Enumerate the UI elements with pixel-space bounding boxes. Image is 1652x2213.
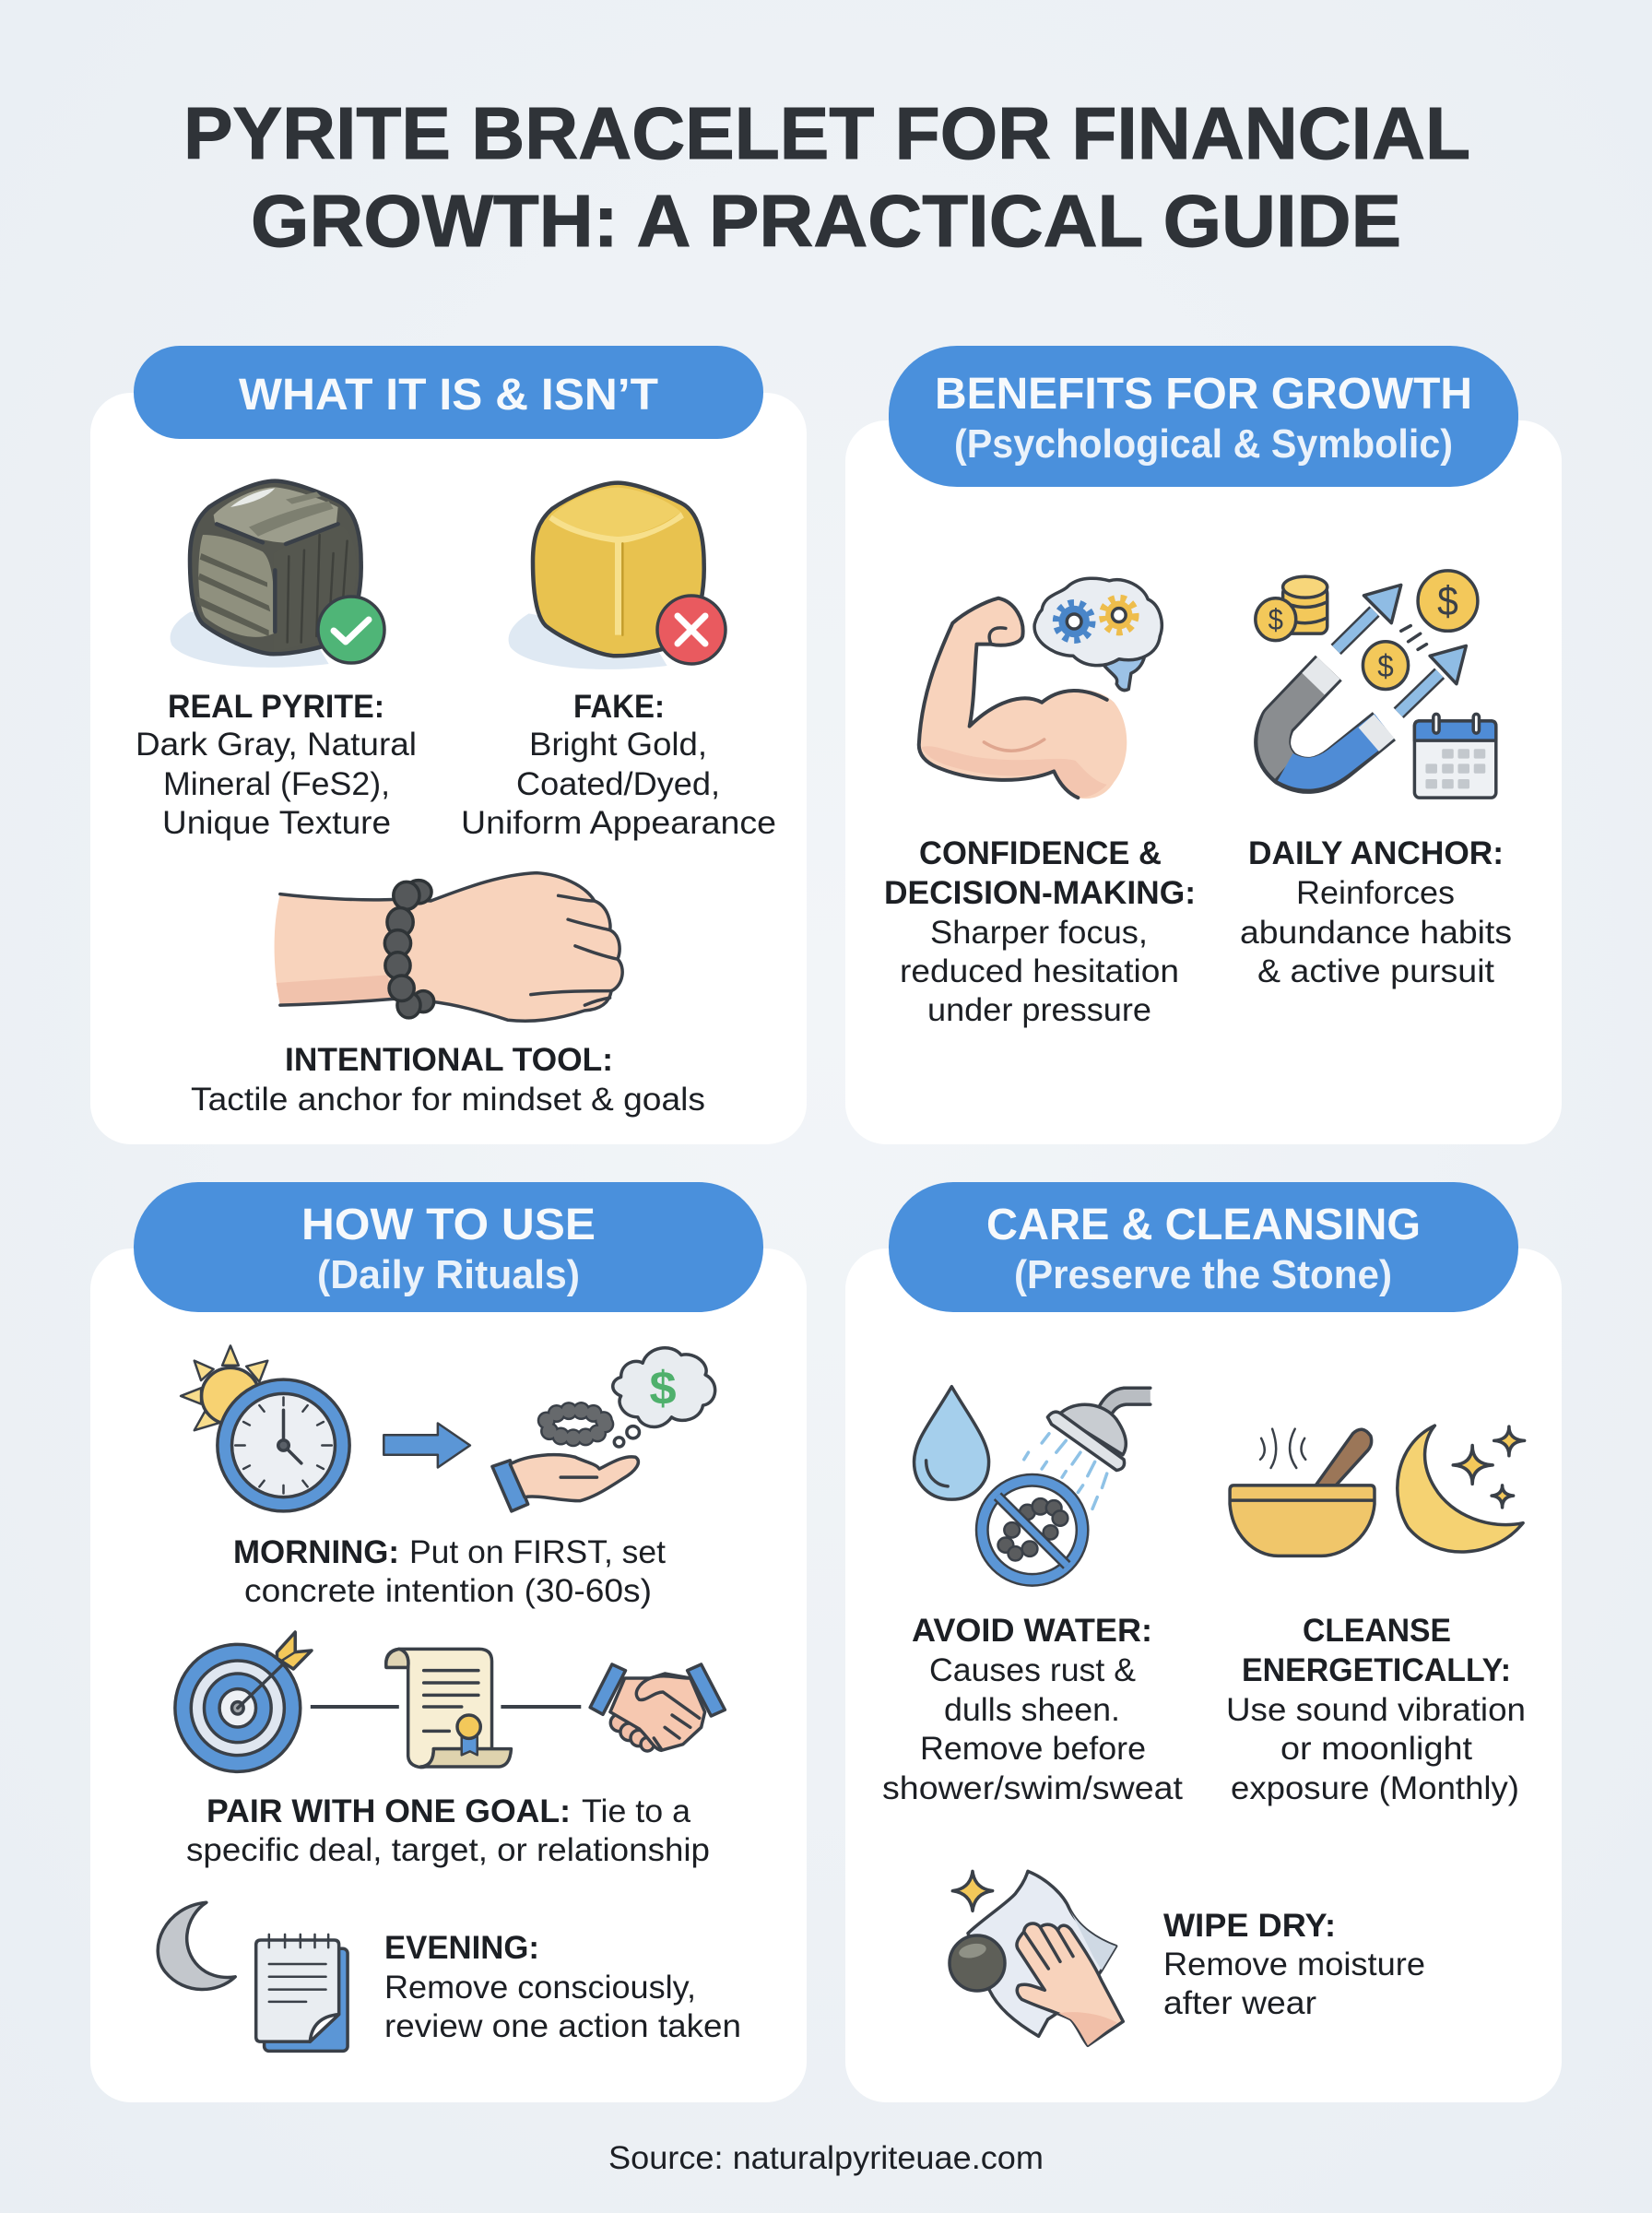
text: cleanse energetically: Use sound vibration (1226, 1692, 1526, 1728)
text: avoid water: Causes rust & (929, 1652, 1136, 1688)
icon: coins: $ (1377, 648, 1394, 684)
text: wipe dry: after wear (1163, 1985, 1316, 2021)
text: confidence and decision-making: Sharper focus, (930, 915, 1148, 951)
text: daily anchor: abundance habits (1240, 915, 1512, 951)
text: intentional tool (191, 1042, 705, 1118)
heading: care and cleansing: (Preserve the Stone) (1014, 1252, 1392, 1297)
icon: coins: $ (1437, 578, 1458, 625)
text: real pyrite: REAL PYRITE: (168, 689, 384, 725)
text: pair with one goal (186, 1793, 710, 1868)
heading: benefits for growth: (Psychological & Symbolic) (954, 421, 1453, 467)
heading: what it is and isn't (134, 346, 763, 439)
icon: crescent moon with stars (1398, 1426, 1525, 1552)
text: fake: Bright Gold, (529, 727, 707, 763)
text: intentional tool: INTENTIONAL TOOL: (285, 1042, 613, 1078)
panel: how to use (90, 1182, 807, 2102)
heading: what it is and isn't: WHAT IT IS & ISN’T (239, 371, 658, 420)
text: cleanse energetically (1226, 1613, 1526, 1806)
heading: care and cleansing (889, 1182, 1518, 1312)
text: wipe dry: Remove moisture (1163, 1947, 1425, 1982)
text: confidence and decision-making: reduced hesitation (900, 953, 1179, 989)
text: evening: EVENING: (384, 1930, 539, 1966)
icon: calendar (1414, 714, 1496, 798)
icon: flexed arm with brain (919, 578, 1162, 799)
icon: wrist with bracelet (275, 873, 622, 1021)
text: pair with one goal: specific deal, target, or relationship (186, 1832, 710, 1868)
text: daily anchor: Reinforces (1296, 875, 1455, 911)
text: fake: FAKE: (573, 689, 665, 725)
panel: benefits for growth (845, 346, 1562, 1144)
text: morning (233, 1534, 666, 1609)
text: daily anchor: DAILY ANCHOR: (1248, 835, 1504, 871)
text: fake: Coated/Dyed, (516, 766, 720, 802)
heading: care and cleansing: CARE & CLEANSING (986, 1201, 1421, 1249)
text: daily anchor: & active pursuit (1257, 953, 1494, 989)
text: morning: concrete intention (30-60s) (244, 1573, 652, 1609)
text: daily anchor (1240, 835, 1512, 989)
text: wipe dry: WIPE DRY: (1163, 1908, 1336, 1944)
icon: target with arrow (175, 1632, 312, 1771)
icon: real pyrite cube (171, 481, 384, 668)
icon: shower head (1024, 1388, 1150, 1509)
text: cleanse energetically: or moonlight (1280, 1731, 1472, 1767)
icon: hand, bracelet and money thought: $ (650, 1361, 677, 1414)
icon: fake gold cube (509, 483, 726, 669)
icon: sun and clock (181, 1345, 349, 1511)
source credit: Source: naturalpyriteuae.com (608, 2140, 1044, 2176)
text: avoid water: AVOID WATER: (912, 1613, 1152, 1649)
text: pair with one goal: Tie to a (582, 1793, 691, 1829)
text: pair with one goal: PAIR WITH ONE GOAL: (206, 1793, 571, 1829)
text: morning: MORNING: (233, 1534, 399, 1570)
text: avoid water: shower/swim/sweat (882, 1770, 1183, 1806)
text: evening: Remove consciously, (384, 1970, 696, 2006)
text: confidence and decision-making: CONFIDENCE & (919, 835, 1162, 871)
icon: singing bowl (1230, 1429, 1375, 1556)
text: avoid water: Remove before (920, 1731, 1146, 1767)
heading: how to use: (Daily Rituals) (317, 1252, 580, 1297)
icon: coins (1256, 571, 1478, 689)
heading: benefits for growth (889, 346, 1518, 487)
panel: what it is and isn't (90, 346, 807, 1144)
text: evening: review one action taken (384, 2008, 741, 2044)
title (183, 92, 1470, 262)
icon: handshake (590, 1664, 725, 1751)
text: morning: Put on FIRST, set (409, 1534, 666, 1570)
icon: cloth wiping stone (950, 1871, 1123, 2045)
icon: water drop (914, 1387, 989, 1499)
text: fake: Uniform Appearance (461, 805, 776, 841)
text: real pyrite: Unique Texture (162, 805, 391, 841)
icon: red cross badge (657, 596, 726, 664)
heading: benefits for growth: BENEFITS FOR GROWTH (935, 370, 1472, 419)
connector lines (311, 1705, 581, 1709)
text: real pyrite: Mineral (FeS2), (163, 766, 390, 802)
text: avoid water: dulls sheen. (944, 1692, 1120, 1728)
text: confidence and decision-making: under pressure (927, 992, 1151, 1028)
text: cleanse energetically: ENERGETICALLY: (1242, 1652, 1511, 1688)
text: cleanse energetically: CLEANSE (1303, 1613, 1451, 1649)
icon: green check badge (318, 597, 384, 663)
text: real pyrite: Dark Gray, Natural (136, 727, 417, 763)
text: fake (461, 689, 776, 841)
text: cleanse energetically: exposure (Monthly) (1231, 1770, 1519, 1806)
heading: how to use: HOW TO USE (301, 1201, 596, 1249)
icon: no bracelet sign (982, 1480, 1082, 1580)
text: wipe dry (1163, 1908, 1425, 2021)
title: PYRITE BRACELET FOR FINANCIAL (183, 92, 1470, 174)
text: evening (384, 1930, 741, 2044)
icon: hand, bracelet and money thought (492, 1348, 715, 1511)
text: avoid water (882, 1613, 1183, 1806)
icon: magnet, coins and calendar (1256, 571, 1496, 798)
icon: scroll contract (386, 1649, 511, 1768)
text: intentional tool: Tactile anchor for mindset & goals (191, 1082, 705, 1118)
icon: gray moon (158, 1902, 235, 1990)
panel: care and cleansing (845, 1182, 1562, 2102)
text: confidence and decision-making (884, 835, 1196, 1028)
heading: how to use (134, 1182, 763, 1312)
text: real pyrite (136, 689, 417, 841)
icon: notepad (256, 1935, 348, 2051)
title: GROWTH: A PRACTICAL GUIDE (251, 180, 1401, 262)
icon: coins: $ (1268, 603, 1283, 636)
text: confidence and decision-making: DECISION-MAKING: (884, 875, 1196, 911)
icon: brain with gears (1034, 578, 1162, 691)
arrow: morning (384, 1424, 470, 1467)
